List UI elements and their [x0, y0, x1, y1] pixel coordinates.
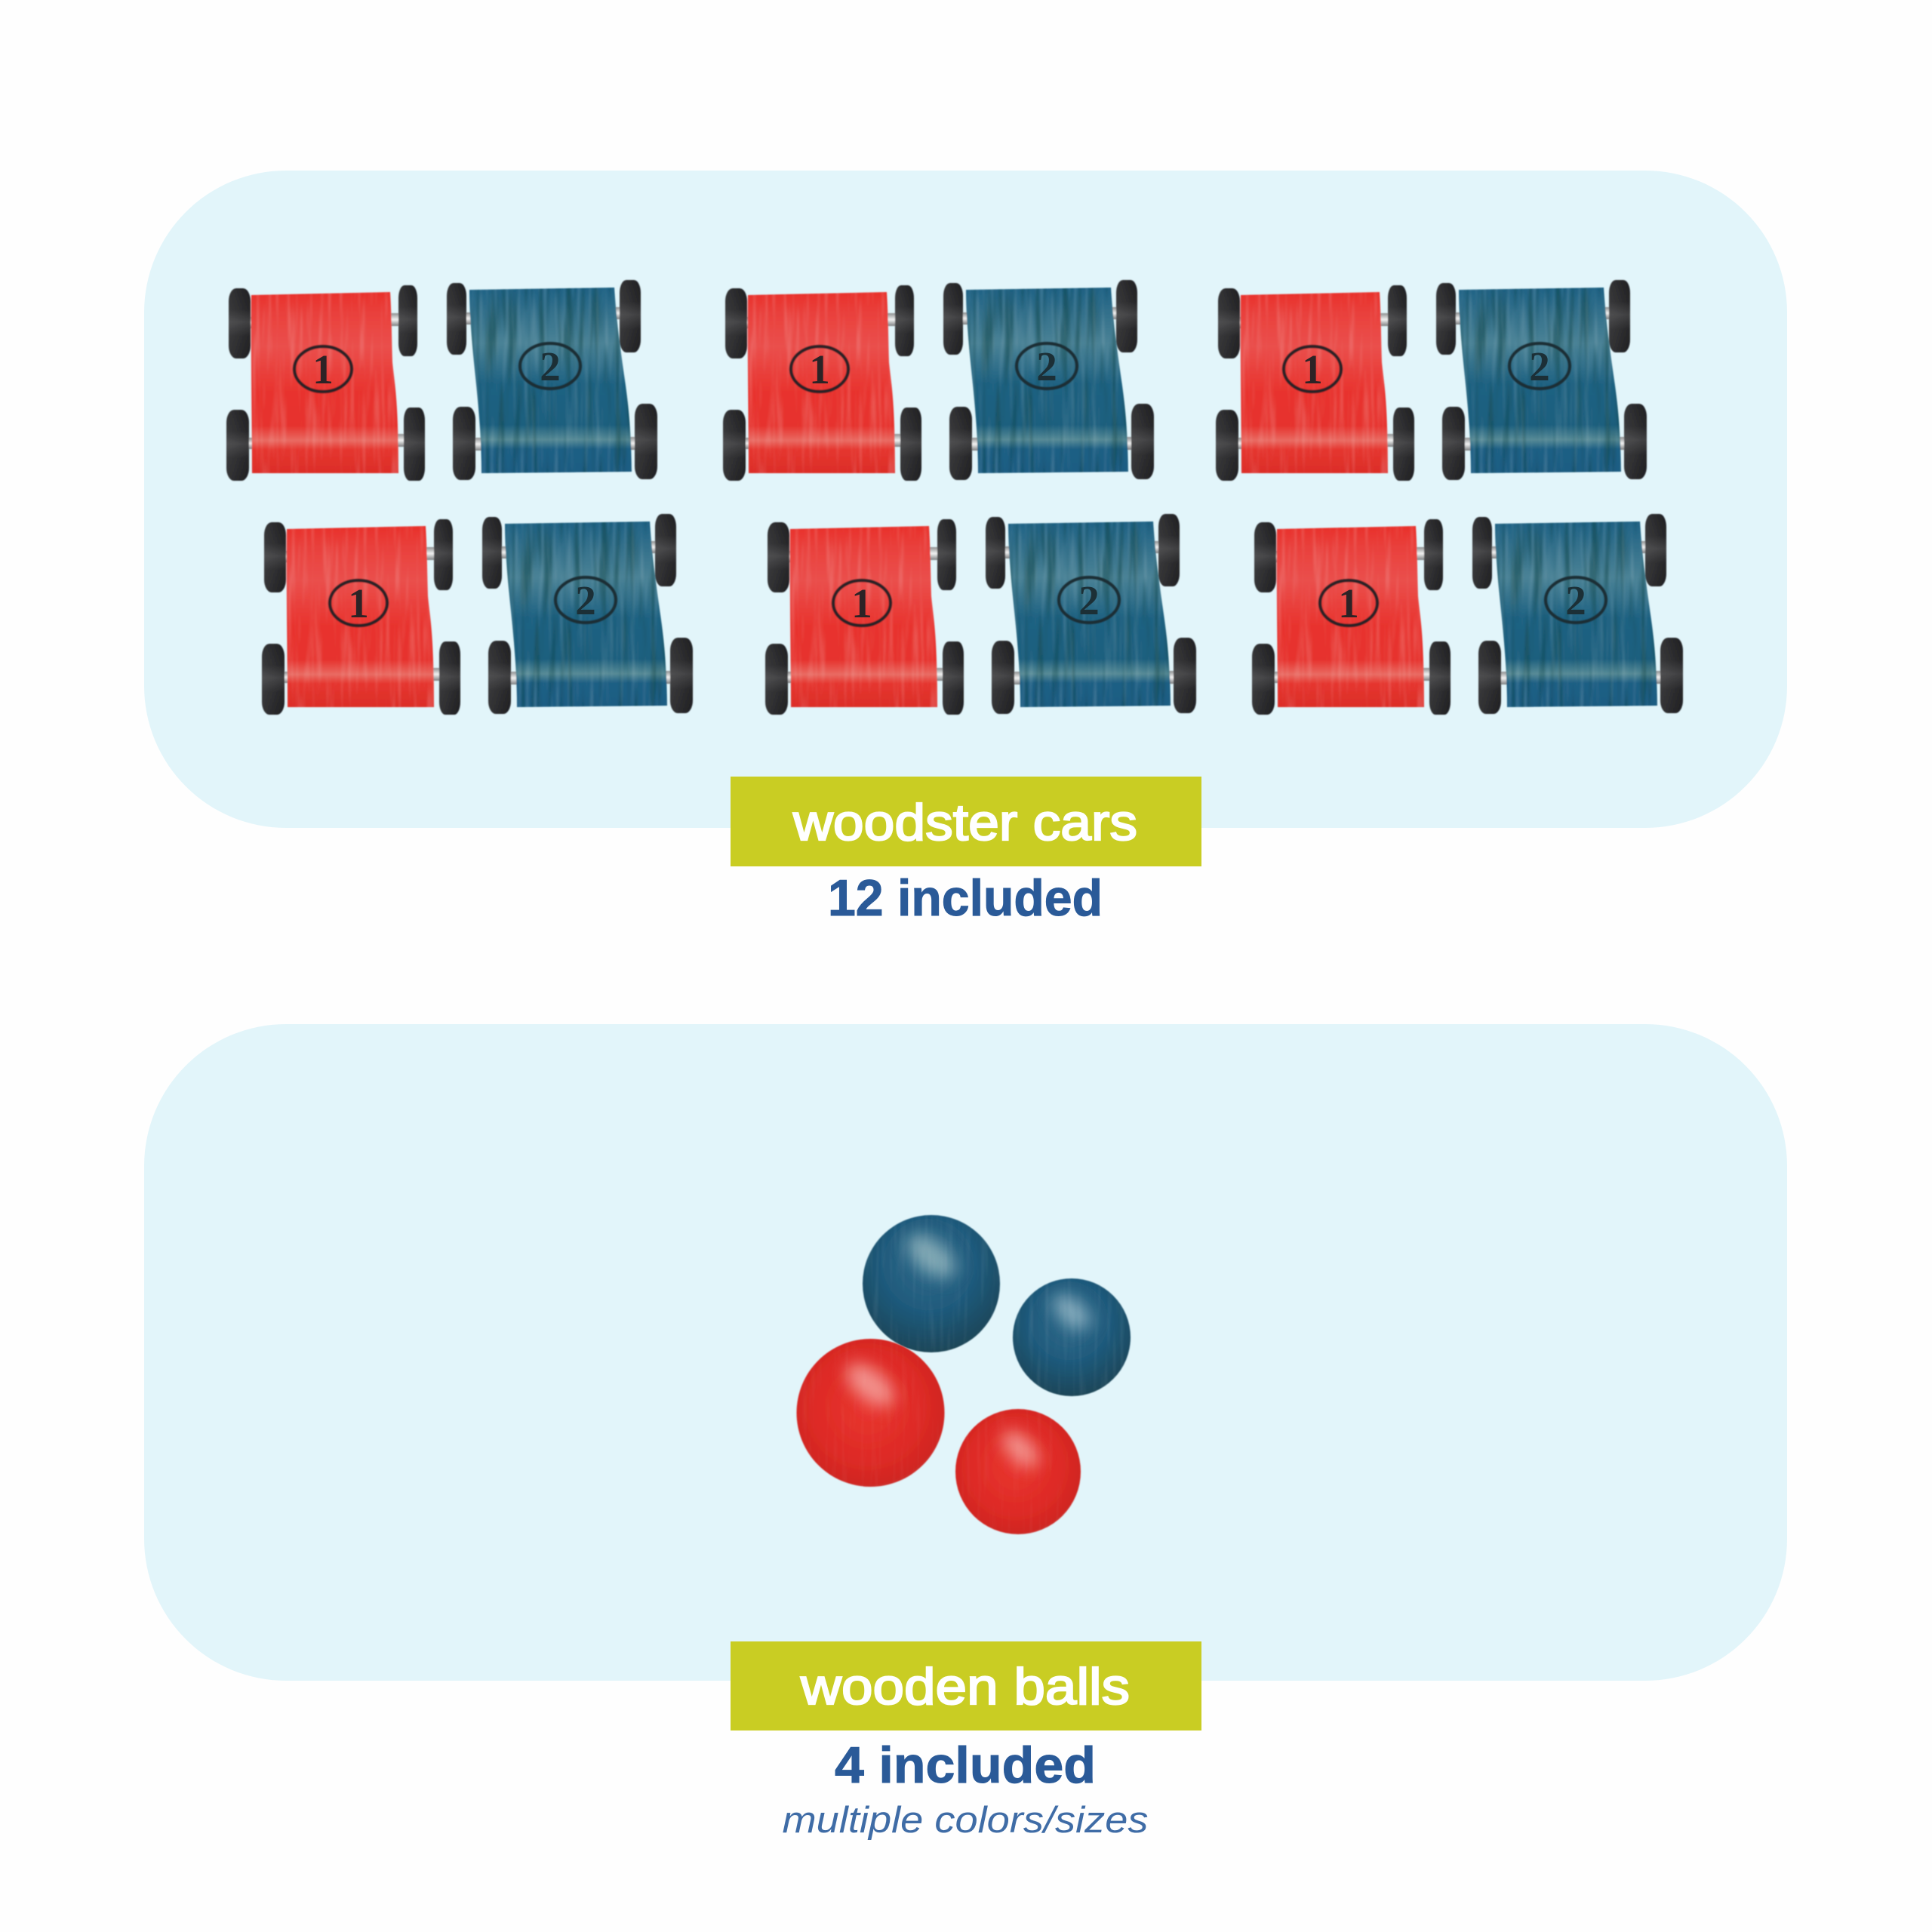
icon: blue car 2, row 2 set 3: [1472, 514, 1683, 714]
label band: woodster cars: [731, 777, 1201, 866]
cars illustration: [226, 280, 1683, 715]
label band: wooden balls: wooden balls: [800, 1658, 1130, 1715]
icon: large blue ball: [863, 1215, 1000, 1352]
panel: woodster cars: [144, 171, 1787, 828]
icon: small blue ball: [1013, 1278, 1131, 1396]
icon: red car 1, row 2 set 3: [1252, 519, 1451, 715]
icon: red car 1, row 2 set 1: [262, 519, 460, 715]
icon: blue car 2, row 1: 2: [540, 343, 561, 389]
balls illustration: [796, 1215, 1131, 1534]
icon: blue car 2, row 2 set 1: [482, 514, 693, 714]
icon: small red ball: [955, 1409, 1081, 1534]
icon: large red ball: [796, 1339, 945, 1487]
icon: blue car 2, row 2 set 3: 2: [1565, 577, 1586, 623]
icon: blue car 2, row 2 set 2: 2: [1078, 577, 1100, 623]
panel: wooden balls: [144, 1024, 1787, 1681]
icon: blue car 2, row 2 set 2: [986, 514, 1196, 714]
icon: blue car 2, row 1: [447, 280, 657, 480]
icon: blue car 2, row 1 set 3: 2: [1529, 343, 1550, 389]
icon: red car 1, row 2 set 1: 1: [348, 580, 369, 626]
icon: blue car 2, row 1 set 2: 2: [1036, 343, 1057, 389]
icon: red car 1, row 1 set 2: [723, 285, 921, 481]
note: multiple colors/sizes: multiple colors/sizes: [782, 1800, 1149, 1841]
icon: red car 1, row 2 set 2: [765, 519, 964, 715]
count: 12 included: 12 included: [828, 869, 1103, 927]
icon: red car 1, row 2 set 2: 1: [851, 580, 872, 626]
icon: red car 1, row 1 set 3: 1: [1302, 346, 1323, 392]
count: 4 included: 4 included: [835, 1737, 1096, 1794]
icon: red car 1, row 1: [226, 285, 425, 481]
icon: red car 1, row 2 set 3: 1: [1338, 580, 1359, 626]
icon: red car 1, row 1: 1: [312, 346, 334, 392]
label band: wooden balls: [731, 1641, 1201, 1730]
icon: red car 1, row 1 set 3: [1216, 285, 1414, 481]
icon: blue car 2, row 1 set 3: [1436, 280, 1647, 480]
icon: blue car 2, row 1 set 2: [943, 280, 1154, 480]
icon: red car 1, row 1 set 2: 1: [809, 346, 830, 392]
label band: woodster cars: woodster cars: [792, 794, 1137, 851]
icon: blue car 2, row 2 set 1: 2: [575, 577, 596, 623]
